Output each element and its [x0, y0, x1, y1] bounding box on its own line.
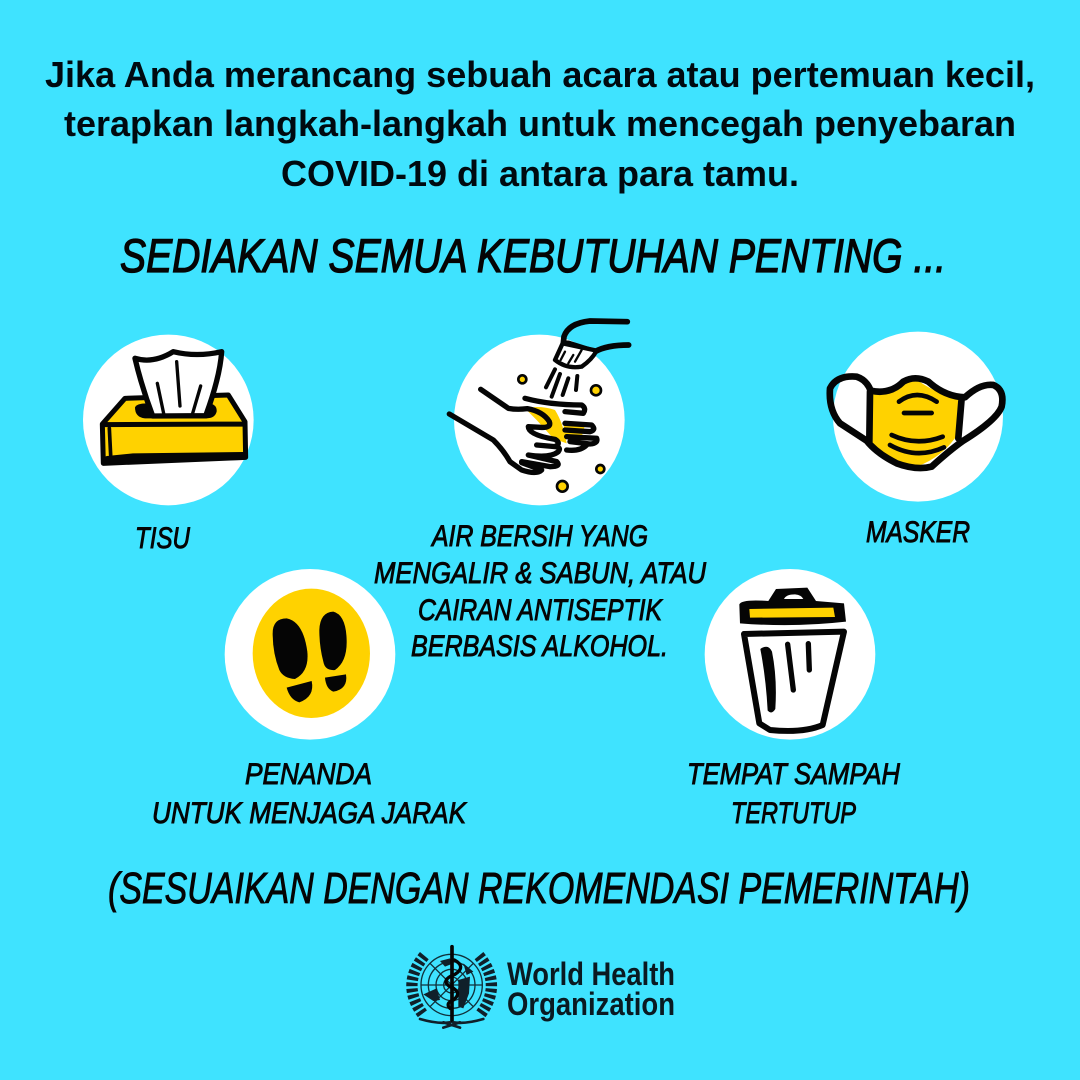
wordmark: [507, 956, 675, 1022]
icon: lidded trash bin: [705, 569, 875, 740]
label: AIR BERSIH YANG: [430, 520, 648, 553]
icon: face mask: [830, 332, 1003, 502]
label: TERTUTUP: [731, 797, 856, 830]
label: BERBASIS ALKOHOL.: [411, 630, 668, 663]
panel: bin: [687, 569, 900, 830]
label: MASKER: [866, 516, 970, 549]
icon: footprints marker: [225, 569, 395, 740]
title: Jika Anda merancang sebuah acara atau pertemuan kecil,: [45, 54, 1035, 95]
icon: tissue box: [83, 335, 254, 505]
icon: washing hands under tap: [449, 321, 629, 505]
title: COVID-19 di antara para tamu.: [281, 153, 799, 194]
label: MENGALIR & SABUN, ATAU: [374, 557, 706, 590]
panel: mask: [830, 332, 1003, 549]
icon: WHO emblem: [412, 947, 491, 1028]
label: TISU: [135, 522, 190, 555]
wordmark: World Health: [507, 956, 675, 992]
panel: handwashing: [374, 321, 706, 663]
panel: tissue: [83, 335, 254, 555]
logo: World Health Organization: [412, 947, 675, 1028]
label: PENANDA: [245, 758, 372, 791]
label: [687, 758, 900, 830]
label: [374, 520, 706, 663]
panel: floor marker: [152, 569, 468, 830]
label: [152, 758, 468, 830]
title: [45, 54, 1035, 194]
label: UNTUK MENJAGA JARAK: [152, 797, 468, 830]
label: CAIRAN ANTISEPTIK: [418, 594, 664, 627]
wordmark: Organization: [507, 986, 675, 1022]
label: TEMPAT SAMPAH: [687, 758, 900, 791]
title: terapkan langkah-langkah untuk mencegah penyebaran: [64, 103, 1016, 144]
